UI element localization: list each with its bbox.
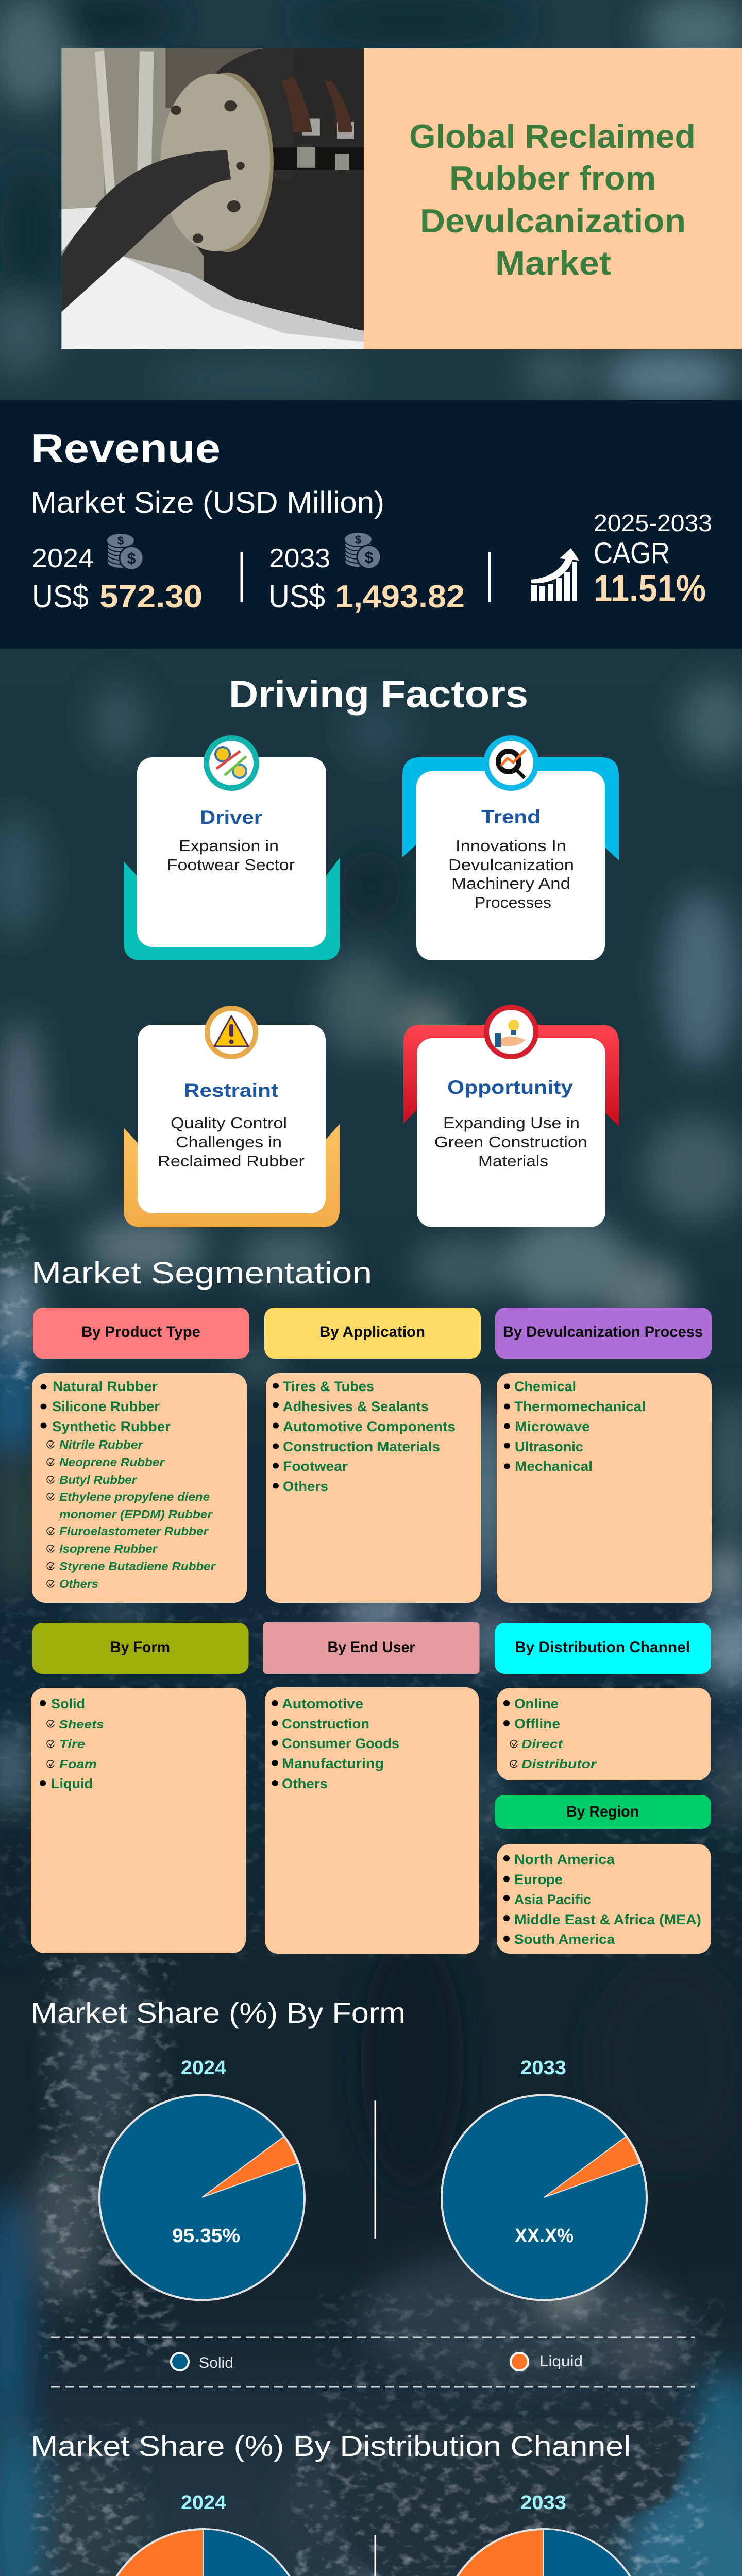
list: regions: Europe bbox=[514, 1872, 563, 1887]
list: product types: Silicone Rubber bbox=[52, 1399, 160, 1414]
driver text bbox=[167, 837, 295, 874]
list: product types: Styrene Butadiene Rubber bbox=[59, 1560, 216, 1573]
list: forms: Liquid bbox=[51, 1776, 93, 1791]
list: processes bbox=[497, 1373, 712, 1603]
list: channels: Distributor bbox=[521, 1757, 597, 1771]
pie chart 2024 bbox=[99, 2057, 305, 2300]
segment: by region bbox=[495, 1795, 711, 1954]
revenue 2024 bbox=[32, 544, 203, 615]
card: driver bbox=[124, 735, 340, 960]
card: restraint bbox=[124, 1006, 340, 1227]
list: applications bbox=[266, 1373, 481, 1603]
trend text: Processes bbox=[475, 893, 551, 911]
icon: restraint bbox=[205, 1006, 258, 1059]
list: product types: Others bbox=[59, 1577, 98, 1590]
segment: by end user: By End User bbox=[328, 1639, 415, 1656]
icon: opportunity bbox=[484, 1005, 538, 1059]
icon: coins 2033: $ bbox=[355, 533, 361, 546]
card: opportunity bbox=[403, 1005, 619, 1227]
pie chart 2024: 2024 bbox=[181, 2492, 226, 2514]
trend text bbox=[448, 837, 574, 911]
list: product types: Natural Rubber bbox=[53, 1379, 158, 1394]
pie chart 2024: 95.35% bbox=[172, 2225, 240, 2247]
trend heading: Trend bbox=[481, 806, 541, 827]
segment: by distribution channel: By Distribution Channel bbox=[515, 1639, 690, 1656]
hero photo: rubber extrusion machine bbox=[61, 47, 383, 349]
restraint text: Reclaimed Rubber bbox=[158, 1152, 305, 1170]
list: channels bbox=[497, 1688, 711, 1780]
icon: coins 2033: $ bbox=[364, 548, 374, 566]
segment: by devulcanization process bbox=[495, 1308, 712, 1603]
title: Rubber from bbox=[449, 159, 656, 197]
segment: by application bbox=[264, 1308, 481, 1603]
cagr block bbox=[594, 510, 712, 609]
restraint heading: Restraint bbox=[184, 1080, 278, 1101]
revenue 2024: US$ bbox=[32, 579, 89, 615]
list: applications: Adhesives & Sealants bbox=[283, 1399, 429, 1414]
list: end users bbox=[265, 1687, 479, 1954]
list: applications: Construction Materials bbox=[283, 1439, 440, 1454]
cagr block: CAGR bbox=[594, 536, 670, 570]
revenue 2024: 2024 bbox=[32, 544, 94, 573]
revenue 2024: 572.30 bbox=[99, 579, 203, 615]
list: regions: North America bbox=[514, 1852, 615, 1867]
pie chart 2033: XX.X% bbox=[515, 2225, 574, 2247]
legend: Liquid bbox=[539, 2353, 583, 2370]
segment: by distribution channel bbox=[495, 1623, 711, 1780]
list: channels: Offline bbox=[514, 1716, 560, 1732]
list: product types: Isoprene Rubber bbox=[59, 1542, 158, 1555]
segment: by form: By Form bbox=[110, 1639, 170, 1656]
segment: by devulcanization process: By Devulcanization Process bbox=[503, 1324, 703, 1341]
opportunity heading: Opportunity bbox=[447, 1077, 573, 1098]
title: Devulcanization bbox=[420, 202, 686, 240]
segment: by application: By Application bbox=[319, 1324, 425, 1341]
list: product types: Nitrile Rubber bbox=[59, 1438, 144, 1451]
list: forms: Foam bbox=[59, 1757, 97, 1771]
cagr block: 11.51% bbox=[594, 568, 706, 609]
icon: growth chart bbox=[531, 548, 579, 601]
icon: coins 2033 bbox=[344, 532, 381, 569]
opportunity text: Materials bbox=[478, 1152, 548, 1170]
list: forms: Tire bbox=[59, 1737, 85, 1751]
list: processes: Ultrasonic bbox=[515, 1439, 583, 1454]
icon: coins 2024: $ bbox=[117, 534, 124, 547]
list: applications: Tires & Tubes bbox=[283, 1379, 374, 1394]
restraint text: Challenges in bbox=[176, 1133, 282, 1151]
cagr block: 2025-2033 bbox=[594, 510, 712, 536]
list: regions bbox=[497, 1844, 711, 1954]
segment: by region: By Region bbox=[566, 1803, 639, 1820]
heading: Market Share (%) By Distribution Channel bbox=[31, 2430, 631, 2462]
card: trend bbox=[402, 735, 619, 960]
driving factors heading: Driving Factors bbox=[229, 673, 528, 716]
revenue heading: Revenue bbox=[31, 426, 221, 471]
driver text: Expansion in bbox=[179, 837, 279, 855]
section: market share by distribution channel bbox=[31, 2430, 695, 2576]
list: regions: Asia Pacific bbox=[514, 1892, 591, 1907]
list: product types: Neoprene Rubber bbox=[59, 1455, 165, 1469]
list: processes: Thermomechanical bbox=[514, 1399, 646, 1414]
list: product types: Synthetic Rubber bbox=[52, 1419, 171, 1434]
segment: by product type bbox=[32, 1308, 249, 1603]
market segmentation heading: Market Segmentation bbox=[31, 1256, 372, 1290]
hero banner bbox=[61, 47, 742, 349]
legend bbox=[171, 2353, 583, 2371]
icon: trend bbox=[483, 735, 539, 791]
market size subheading: Market Size (USD Million) bbox=[31, 486, 384, 519]
heading: Market Share (%) By Form bbox=[31, 1996, 406, 2029]
pie chart 2024: 2024 bbox=[181, 2057, 226, 2079]
revenue 2033: 1,493.82 bbox=[335, 579, 465, 615]
section: market share by form bbox=[31, 1996, 695, 2387]
pie chart 2033: 2033 bbox=[520, 2057, 566, 2079]
list: end users: Others bbox=[282, 1776, 328, 1791]
legend: Solid bbox=[199, 2354, 233, 2371]
list: product types: monomer (EPDM) Rubber bbox=[59, 1507, 213, 1521]
restraint text bbox=[158, 1114, 305, 1170]
list: applications: Footwear bbox=[283, 1459, 348, 1474]
list: regions: South America bbox=[514, 1931, 615, 1947]
opportunity text: Expanding Use in bbox=[443, 1114, 580, 1132]
revenue 2033: 2033 bbox=[269, 544, 330, 573]
segment: by product type: By Product Type bbox=[81, 1324, 200, 1341]
list: product types: Butyl Rubber bbox=[59, 1473, 138, 1486]
list: forms: Solid bbox=[51, 1696, 85, 1711]
trend text: Machinery And bbox=[451, 874, 570, 892]
list: forms bbox=[31, 1688, 246, 1953]
pie chart 2033: 2033 bbox=[520, 2492, 566, 2514]
list: processes: Mechanical bbox=[515, 1459, 593, 1474]
pie chart 2033 bbox=[442, 2057, 647, 2300]
restraint text: Quality Control bbox=[171, 1114, 287, 1132]
list: channels: Direct bbox=[521, 1737, 563, 1751]
title panel bbox=[364, 48, 742, 349]
list: product types: Ethylene propylene diene bbox=[59, 1490, 210, 1503]
list: end users: Manufacturing bbox=[282, 1756, 384, 1771]
trend text: Devulcanization bbox=[448, 856, 574, 874]
list: processes: Microwave bbox=[515, 1419, 590, 1434]
list: regions: Middle East & Africa (MEA) bbox=[514, 1912, 701, 1927]
revenue band bbox=[0, 400, 742, 649]
revenue 2033: US$ bbox=[268, 579, 325, 615]
title bbox=[409, 117, 696, 282]
title: Global Reclaimed bbox=[409, 117, 696, 155]
pie chart 2033 bbox=[441, 2492, 646, 2576]
driver heading: Driver bbox=[200, 807, 262, 828]
driver text: Footwear Sector bbox=[167, 856, 295, 874]
list: end users: Construction bbox=[282, 1716, 369, 1732]
icon: coins 2024: $ bbox=[127, 549, 136, 567]
list: end users: Automotive bbox=[282, 1696, 363, 1711]
revenue 2033 bbox=[268, 544, 465, 615]
list: product types: Fluroelastometer Rubber bbox=[59, 1524, 209, 1538]
list: applications: Others bbox=[283, 1479, 328, 1494]
list: forms: Sheets bbox=[59, 1718, 104, 1731]
list: applications: Automotive Components bbox=[283, 1419, 456, 1434]
pie chart 2024 bbox=[100, 2492, 306, 2576]
icon: coins 2024 bbox=[107, 533, 143, 570]
title: Market bbox=[495, 244, 611, 282]
opportunity text: Green Construction bbox=[434, 1133, 587, 1151]
trend text: Innovations In bbox=[456, 837, 566, 855]
opportunity text bbox=[434, 1114, 587, 1170]
list: channels: Online bbox=[514, 1696, 559, 1711]
segment: by end user bbox=[263, 1622, 479, 1954]
icon: driver bbox=[204, 735, 259, 791]
segment: by form bbox=[31, 1623, 248, 1953]
list: product types bbox=[32, 1373, 247, 1603]
list: processes: Chemical bbox=[514, 1379, 576, 1394]
list: end users: Consumer Goods bbox=[282, 1736, 399, 1751]
